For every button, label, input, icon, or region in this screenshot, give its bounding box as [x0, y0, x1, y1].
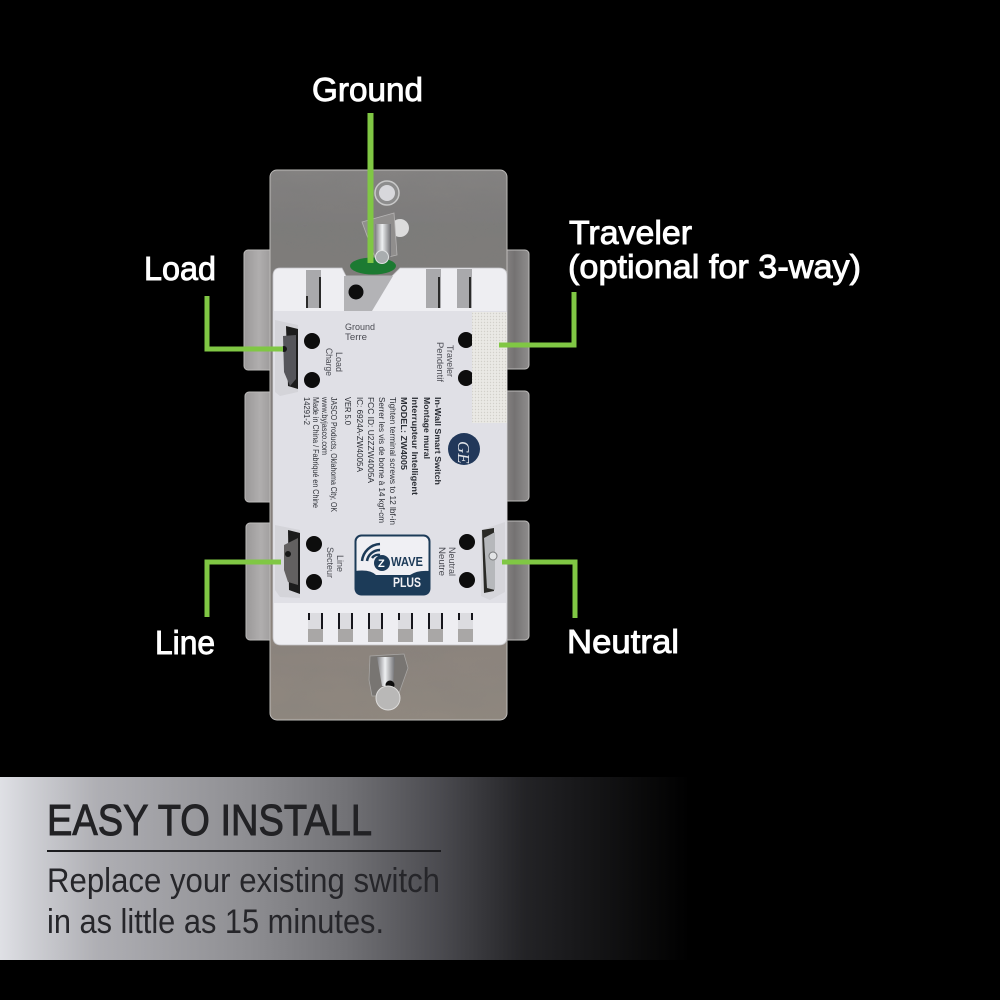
terminal labels: Ground	[345, 322, 375, 333]
product regulatory text: www.byjasco.com	[320, 396, 329, 455]
icon: GE logo	[448, 433, 480, 465]
top mounting screw and slot	[362, 181, 409, 264]
product regulatory text: 14291-2	[302, 397, 311, 426]
product regulatory text: VER 5.0	[343, 397, 353, 425]
screw terminal: line	[275, 525, 300, 598]
product regulatory text: JASCO Products, Oklahoma City, OK	[329, 397, 338, 513]
bottom mounting screw	[369, 654, 408, 710]
callout line: Ground	[368, 113, 374, 263]
terminal holes	[304, 332, 475, 590]
switch product photo	[244, 170, 529, 720]
terminal labels: Neutre	[436, 547, 447, 576]
terminal labels	[323, 322, 457, 578]
terminal labels: Secteur	[324, 547, 335, 578]
body text	[47, 862, 440, 941]
panel: easy to install	[0, 777, 690, 960]
icon: GE logo: GE	[454, 441, 473, 464]
terminal labels: Traveler	[444, 345, 455, 377]
white switch housing	[273, 268, 507, 645]
product regulatory text: IC: 6924A-ZW4005A	[355, 397, 365, 472]
product regulatory text: Tighten terminal screws to 12 lbf-in	[388, 397, 398, 525]
product regulatory text: MODEL: ZW4005	[399, 397, 409, 470]
terminal labels: Charge	[323, 348, 334, 376]
product regulatory text: Serrer les vis de borne à 14 kgf-cm	[377, 397, 387, 523]
product regulatory text: Interrupteur Intelligent	[410, 397, 420, 495]
body text: Replace your existing switch	[47, 862, 440, 900]
product regulatory text: In-Wall Smart Switch	[433, 397, 443, 485]
product regulatory text: Made in China / Fabriqué en Chine	[311, 397, 320, 508]
callout line: Load	[207, 296, 283, 349]
terminal labels: Line	[334, 555, 345, 572]
terminal labels: Terre	[345, 332, 367, 343]
callout line: Traveler	[499, 292, 574, 345]
icon: Z-Wave Plus logo: PLUS	[393, 575, 421, 590]
icon: Z-Wave Plus logo	[355, 536, 430, 595]
ground recess and hole	[344, 276, 393, 311]
product regulatory text	[302, 396, 443, 525]
label: Traveler (optional for 3-way): Traveler	[569, 214, 692, 251]
callout line: Line	[207, 562, 281, 617]
traveler tape	[472, 312, 507, 423]
label: Traveler (optional for 3-way)	[568, 214, 861, 285]
label: Load: Load	[144, 250, 216, 287]
mounting plate	[244, 170, 529, 720]
icon: Z-Wave Plus logo: WAVE	[391, 555, 423, 569]
top slots	[306, 269, 472, 308]
label: Traveler (optional for 3-way): (optional for 3-way)	[568, 248, 861, 285]
label: Line: Line	[155, 624, 215, 661]
terminal labels: Neutral	[446, 547, 457, 576]
callout line: Neutral	[502, 562, 575, 618]
body text: in as little as 15 minutes.	[47, 903, 384, 941]
product regulatory text: FCC ID: U2ZZW4005A	[366, 397, 376, 483]
green ground wire nut	[350, 258, 396, 274]
terminal labels: Pendentif	[434, 342, 445, 382]
heading: EASY TO INSTALL	[47, 796, 372, 845]
terminal labels: Load	[333, 352, 344, 372]
bottom slots	[308, 613, 473, 642]
screw terminal: load	[275, 320, 298, 396]
product regulatory text: Montage mural	[422, 397, 432, 459]
label: Neutral: Neutral	[567, 623, 679, 660]
icon: Z-Wave Plus logo: Z	[378, 558, 385, 570]
label: Ground: Ground	[312, 71, 423, 108]
screw terminal: neutral	[481, 522, 505, 600]
